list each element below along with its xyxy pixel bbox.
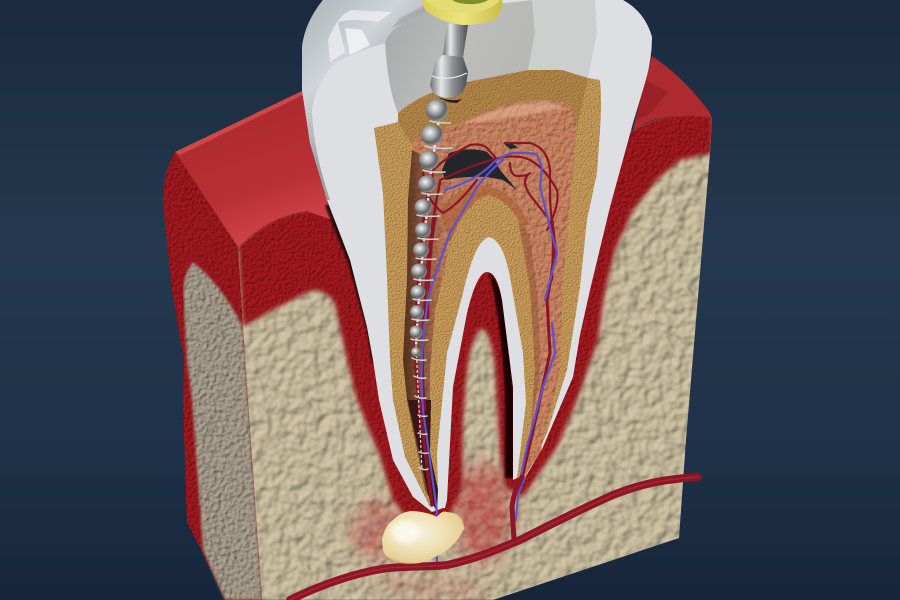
endodontic file: spiral blade xyxy=(410,99,452,470)
dentin xyxy=(374,70,601,507)
dentin roof shade xyxy=(398,70,588,145)
gum top surface, right xyxy=(633,56,712,130)
crown middle band xyxy=(528,0,597,78)
endodontic file: yellow stopper xyxy=(422,0,503,25)
shadow between tooth and gum xyxy=(327,205,374,362)
blood vessels and nerves xyxy=(415,143,558,562)
crown enamel, left xyxy=(302,0,430,200)
gum tissue on the front face xyxy=(236,110,714,525)
endodontic file: metal handle xyxy=(430,23,468,103)
tooth: main section xyxy=(302,0,652,512)
shadow inside the root furcation xyxy=(489,272,514,478)
crown recess xyxy=(385,0,535,113)
necrotic tissue xyxy=(442,143,518,190)
gum top surface, left xyxy=(175,91,338,247)
red vessels in chamber and canals xyxy=(415,143,558,505)
pulp chamber xyxy=(403,100,577,505)
lower canal, left root xyxy=(408,400,438,512)
periapical abscess xyxy=(382,511,464,564)
blue nerves xyxy=(422,153,557,562)
jaw block: left side face xyxy=(163,152,262,600)
jaw block: front bone face xyxy=(238,113,712,600)
blood staining around the abscess xyxy=(352,464,512,598)
main blood vessel xyxy=(290,477,698,600)
